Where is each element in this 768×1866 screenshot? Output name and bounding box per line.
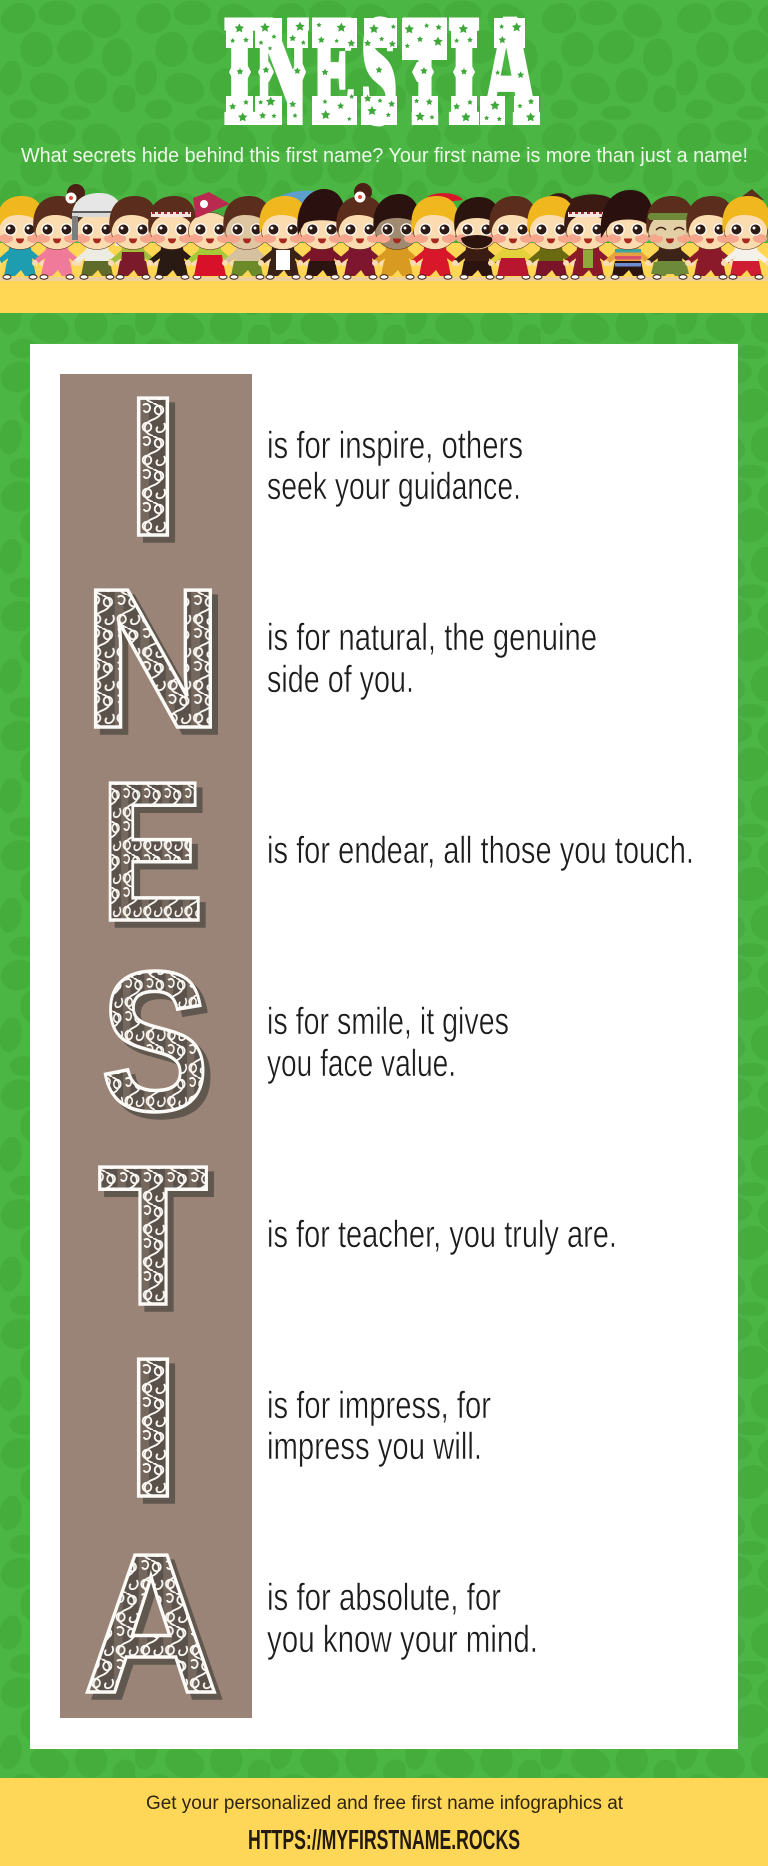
text: A line: you know your mind. xyxy=(267,1619,538,1661)
text: I line: seek your guidance. xyxy=(267,466,521,508)
brown letter column xyxy=(60,356,252,1741)
text: A line: is for absolute, for xyxy=(267,1577,501,1619)
title stars xyxy=(229,22,535,121)
letter S: S xyxy=(107,936,215,1159)
character 3 xyxy=(72,193,123,279)
text: N line xyxy=(267,617,597,701)
character 1 xyxy=(0,196,45,279)
text: I line second xyxy=(267,1385,491,1468)
footer url: HTTPS://MYFIRSTNAME.ROCKS xyxy=(248,1824,520,1855)
header title xyxy=(224,0,539,155)
text: S line: you face value. xyxy=(267,1043,456,1085)
character 20 xyxy=(721,189,768,279)
character 17 xyxy=(601,190,653,279)
character 6 xyxy=(185,192,235,279)
character 13 xyxy=(452,197,502,279)
text: I line second: is for impress, for xyxy=(267,1385,491,1427)
character 8 xyxy=(258,191,325,279)
character 5 xyxy=(147,196,197,279)
character 18 xyxy=(645,196,695,279)
text: N line: is for natural, the genuine xyxy=(267,617,597,659)
text: I line second: impress you will. xyxy=(267,1426,482,1468)
text: N line: side of you. xyxy=(267,659,414,701)
subtitle: What secrets hide behind this first name? Your first name is more than just a name! xyxy=(21,145,748,167)
character 11 xyxy=(372,194,422,279)
character 2 xyxy=(32,184,85,279)
row of cartoon characters xyxy=(0,183,768,279)
letter E: E xyxy=(100,741,204,963)
character 16 xyxy=(563,194,616,279)
footer band xyxy=(0,1778,768,1866)
text: I line: is for inspire, others xyxy=(267,425,523,467)
letter N: N xyxy=(83,547,223,769)
letter T: T xyxy=(104,1131,214,1353)
main white panel xyxy=(30,344,738,1749)
character 12 xyxy=(410,193,463,279)
letter S: S xyxy=(101,930,209,1153)
letter I second: I xyxy=(131,1323,187,1545)
letter I: I xyxy=(125,356,181,578)
letter N: N xyxy=(89,553,229,775)
character 19 xyxy=(685,196,735,279)
character 15 xyxy=(526,193,577,279)
letter I second: I xyxy=(125,1317,181,1539)
character 14 xyxy=(488,196,538,279)
text: T line: is for teacher, you truly are. xyxy=(267,1214,617,1256)
text: S line: is for smile, it gives xyxy=(267,1001,509,1043)
character 7 xyxy=(222,196,272,279)
letter A: A xyxy=(89,1519,225,1741)
letter E: E xyxy=(106,747,210,969)
text: I line xyxy=(267,425,523,508)
letter T: T xyxy=(98,1125,208,1347)
character 4 xyxy=(108,196,158,279)
text: S line xyxy=(267,1001,509,1085)
yellow header band xyxy=(0,243,768,313)
character 9 xyxy=(297,189,347,279)
letter I: I xyxy=(131,362,187,584)
footer text: Get your personalized and free first name infographics at xyxy=(146,1793,624,1814)
text: A line xyxy=(267,1577,538,1661)
character 10 xyxy=(335,183,385,279)
letter A: A xyxy=(83,1513,219,1735)
title slab blocks xyxy=(226,18,539,125)
